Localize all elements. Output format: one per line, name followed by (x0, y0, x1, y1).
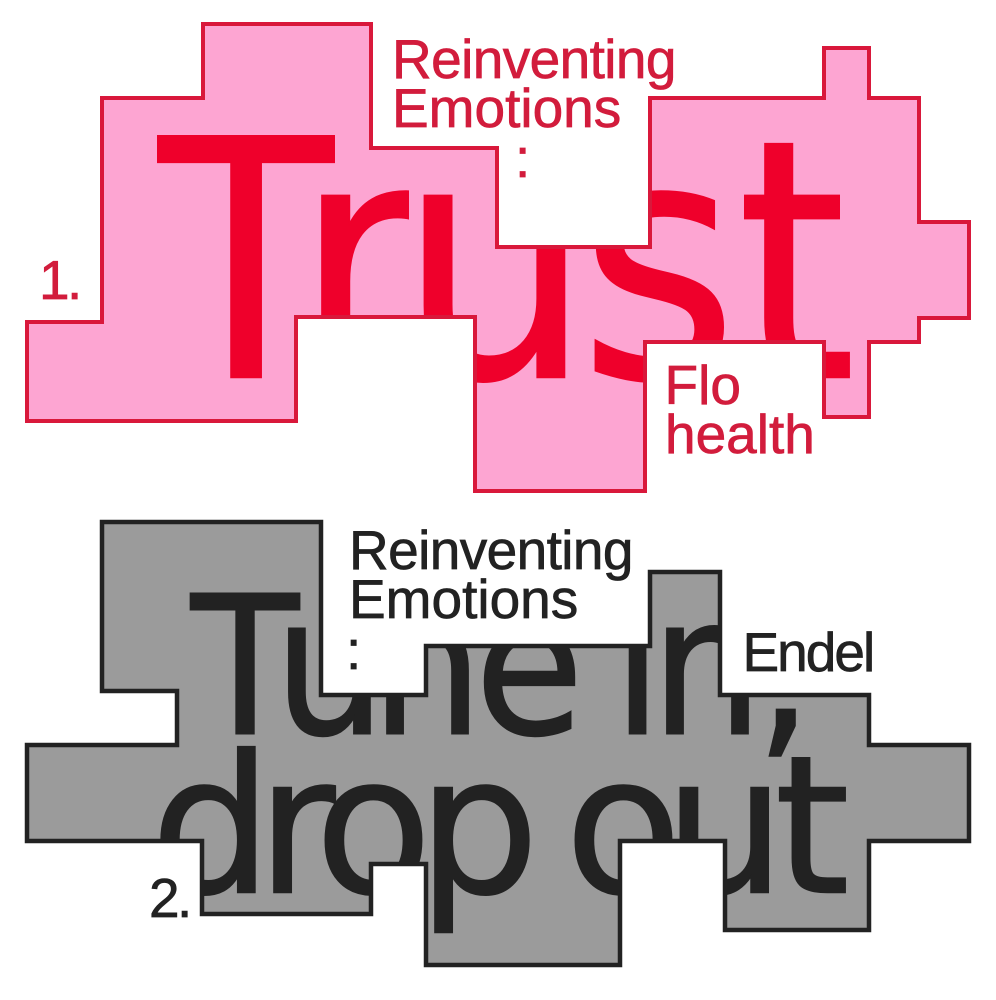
series title: Reinventing (392, 28, 676, 90)
series title: Emotions (349, 568, 578, 630)
series title: Emotions (392, 77, 621, 139)
headline: Tune in, drop out (160, 592, 846, 934)
number 2: 2. (149, 867, 192, 929)
headline: Tune in, drop out: Tune in, (190, 556, 812, 779)
headline: Trust: Trust (148, 69, 857, 457)
speaker: Flo health (664, 354, 815, 465)
number 1: 1. (39, 249, 82, 311)
speaker: Flo health: health (665, 403, 815, 465)
series title: : (515, 127, 530, 189)
pink shape outline (27, 24, 969, 491)
series title: : (346, 619, 361, 681)
series title: Reinventing (349, 519, 633, 581)
grey puzzle shape fill (27, 522, 969, 965)
speaker: Flo health: Flo (664, 354, 741, 416)
speaker: Endel: Endel (742, 621, 873, 683)
pink puzzle shape fill (27, 24, 969, 491)
series title (346, 519, 633, 681)
grey shape outline (27, 522, 969, 965)
panel: Tune in, drop out, Endel (27, 519, 969, 965)
series title (392, 28, 676, 189)
headline: Tune in, drop out: drop out (150, 716, 850, 938)
panel: Trust, Flo health (27, 24, 969, 491)
headline: Trust (157, 135, 850, 383)
